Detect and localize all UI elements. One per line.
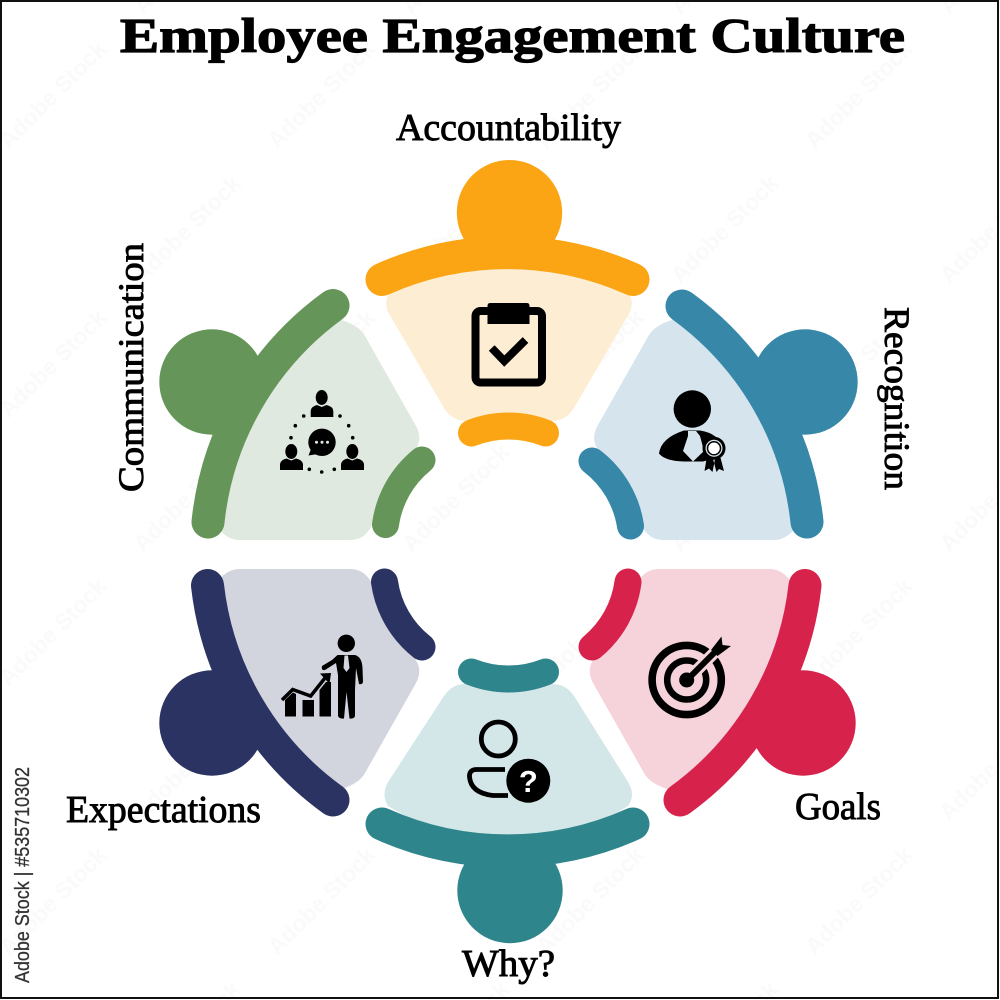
stock id caption: Adobe Stock | #535710302 (12, 767, 34, 983)
label: Why?: Why? (462, 943, 555, 985)
label: Accountability: Accountability (396, 107, 621, 149)
wedge: Why? (teal) (382, 672, 633, 943)
icon: team communication (280, 390, 364, 474)
wedge: Goals (red) (590, 569, 856, 800)
icon: employee with award rosette (659, 390, 726, 472)
icon: person with question mark (469, 722, 550, 803)
icon: clipboard with check (476, 303, 542, 382)
label: Recognition: Recognition (877, 307, 917, 490)
label: Communication: Communication (111, 243, 151, 492)
wedge: Expectations (navy) (159, 569, 422, 800)
icon: person presenting growth chart (282, 635, 363, 719)
title: Employee Engagement Culture (120, 8, 905, 63)
wedge: Accountability (orange) (382, 160, 633, 433)
wedge: Communication (green) (159, 306, 422, 540)
label: Expectations: Expectations (66, 789, 261, 831)
icon: person with question mark: ? (519, 764, 538, 799)
wedge: Recognition (blue) (592, 306, 858, 540)
label: Goals: Goals (795, 786, 881, 828)
icon: target with arrow (652, 636, 731, 715)
